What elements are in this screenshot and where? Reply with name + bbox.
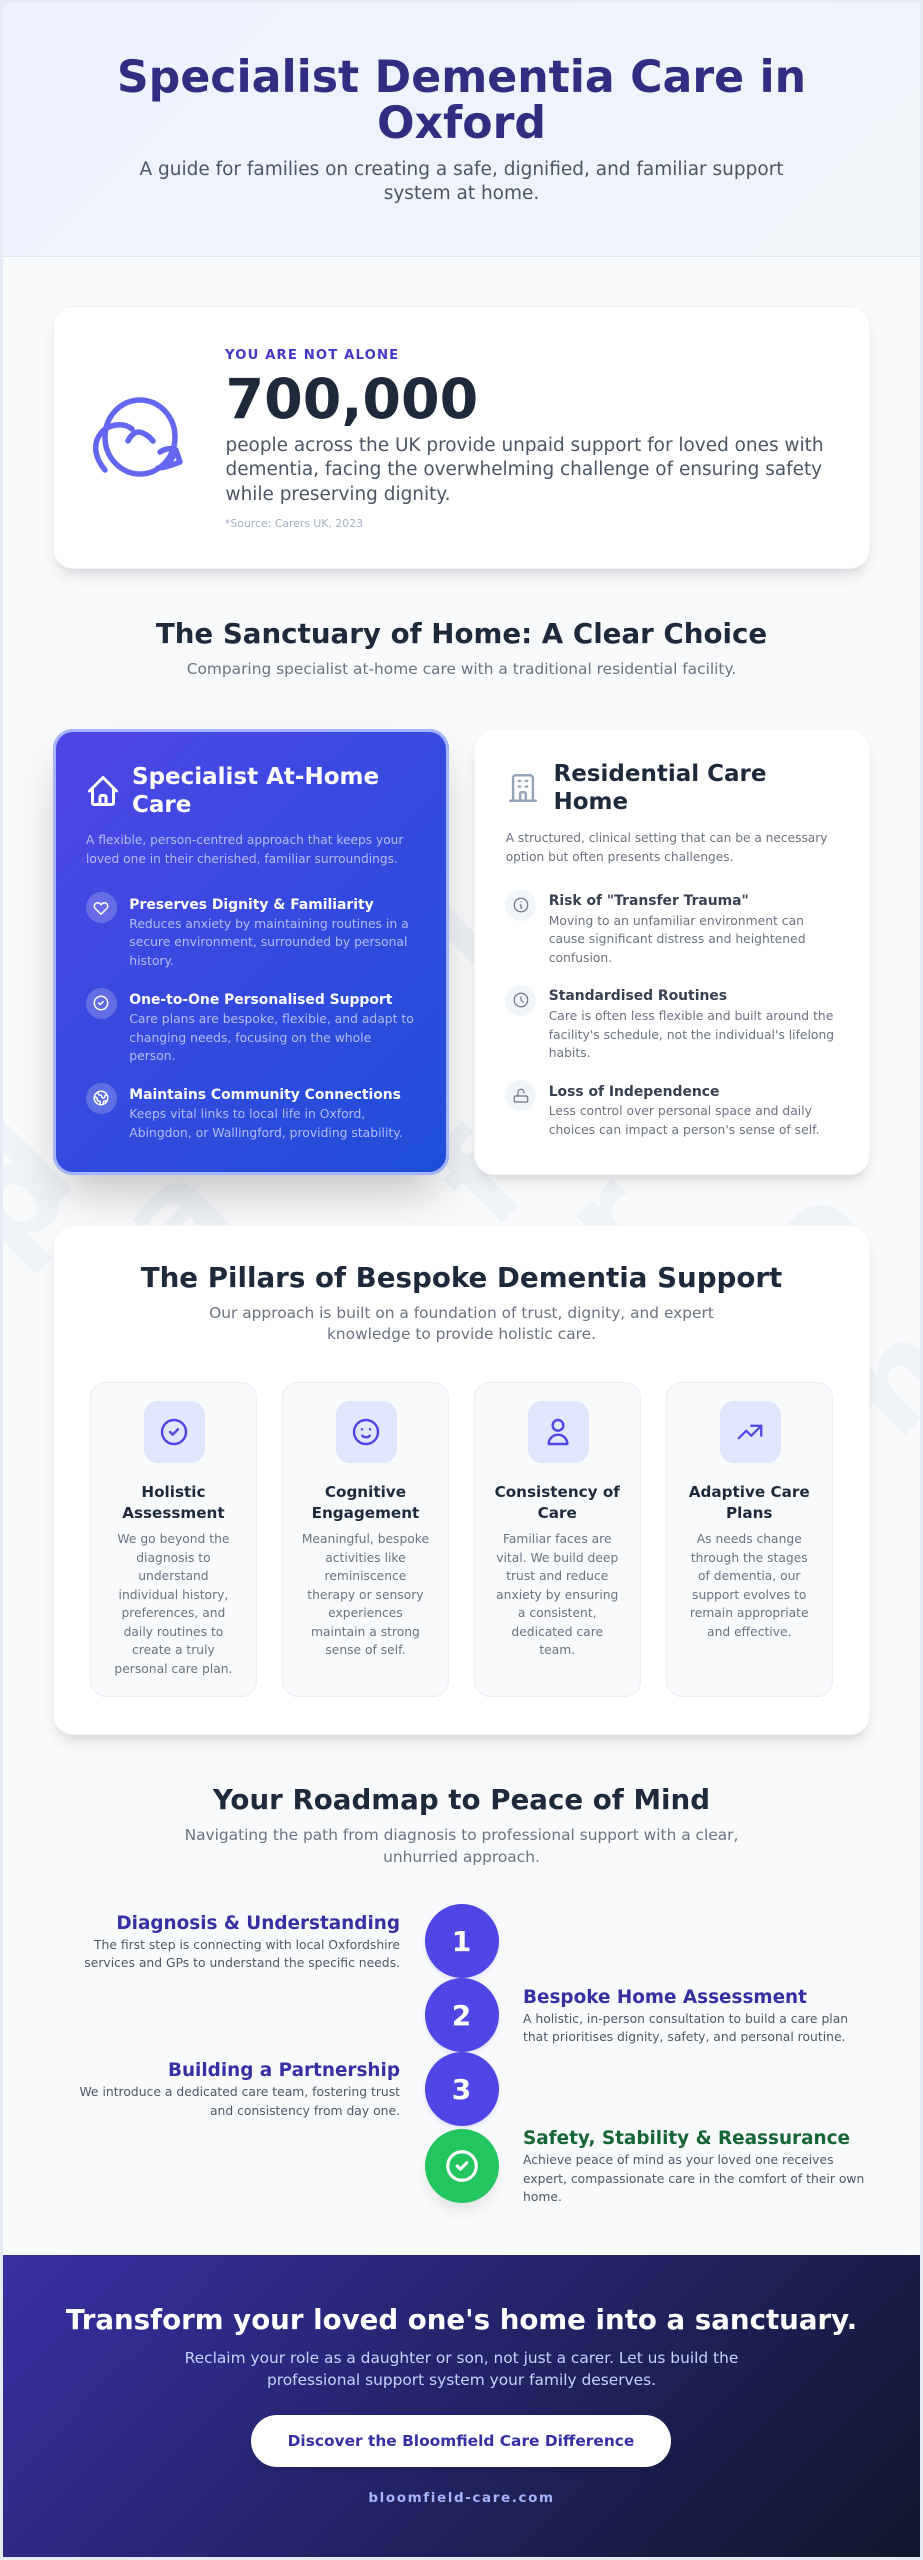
item text: choices can impact a person's sense of self.	[549, 1123, 820, 1137]
item text: Care plans are bespoke, flexible, and adapt to	[129, 1012, 414, 1026]
step 1 number: 1	[452, 1925, 471, 1958]
item: transfer trauma	[505, 890, 806, 965]
heading: sanctuary section: The Sanctuary of Home: A Clear Choice	[156, 617, 767, 650]
subheading	[209, 1304, 714, 1343]
pillar title: Plans	[726, 1504, 772, 1522]
pillar text: reminiscence	[325, 1569, 406, 1583]
subtitle	[139, 159, 784, 204]
pillar text: of dementia, our	[698, 1569, 800, 1583]
step description: We introduce a dedicated care team, fostering trust	[79, 2085, 400, 2099]
pillar text: understand	[138, 1569, 209, 1583]
subheading	[185, 1826, 738, 1866]
title	[117, 52, 806, 148]
item: community connections	[86, 1083, 403, 1140]
pillar text: Familiar faces are	[503, 1532, 612, 1546]
cta text	[3, 2348, 920, 2391]
item text: Care is often less flexible and built around the	[549, 1009, 833, 1023]
step 1 text	[84, 1913, 400, 1970]
cta text: Reclaim your role as a daughter or son, not just a carer. Let us build the	[185, 2349, 738, 2367]
pillar text	[114, 1532, 232, 1676]
pillar text: support evolves to	[692, 1588, 806, 1602]
subtitle: system at home.	[384, 183, 539, 204]
card description: A structured, clinical setting that can be a necessary	[506, 831, 827, 845]
pillar text: create a truly	[132, 1643, 215, 1657]
item text: Keeps vital links to local life in Oxford,	[129, 1107, 365, 1121]
big number: 700,000	[226, 367, 478, 432]
item: personalised support	[86, 988, 414, 1063]
pillar title	[688, 1483, 810, 1522]
heading: Your Roadmap to Peace of Mind	[213, 1783, 710, 1816]
pillar text	[302, 1532, 429, 1657]
step description: The first step is connecting with local Oxfordshire	[94, 1938, 400, 1952]
pillar title: Engagement	[312, 1504, 419, 1522]
item text	[129, 1107, 403, 1140]
pillar text: trust and reduce	[506, 1569, 608, 1583]
pillar text: therapy or sensory	[307, 1588, 424, 1602]
step title: Safety, Stability & Reassurance	[523, 2128, 850, 2149]
icon: check badge	[86, 988, 117, 1018]
title: Specialist Dementia Care in	[117, 52, 806, 102]
card heading: Care	[132, 792, 191, 818]
card description: option but often presents challenges.	[506, 850, 734, 864]
subtitle: A guide for families on creating a safe, dignified, and familiar support	[139, 159, 784, 180]
item text	[549, 1009, 834, 1060]
step 3 number: 3	[452, 2073, 471, 2106]
card heading: Specialist At-Home	[132, 764, 379, 790]
step 2 text	[523, 1987, 848, 2044]
pillar text: sense of self.	[325, 1643, 406, 1657]
item text: changing needs, focusing on the whole	[129, 1031, 371, 1045]
pillar text: activities like	[325, 1551, 406, 1565]
pillar text: remain appropriate	[690, 1606, 809, 1620]
pillar text: Meaningful, bespoke	[302, 1532, 429, 1546]
pillar text	[690, 1532, 809, 1639]
watermark background: l	[394, 869, 532, 1007]
pillar text: team.	[539, 1643, 575, 1657]
item text: Abingdon, or Wallingford, providing stability.	[129, 1126, 403, 1140]
subheading: sanctuary section: Comparing specialist at-home care with a traditional residential facility.	[187, 660, 736, 678]
item text	[129, 1012, 414, 1063]
item text	[549, 1104, 820, 1137]
card heading	[554, 761, 766, 815]
pillar: cognitive engagement	[282, 1382, 449, 1697]
panel: specialist at-home care	[53, 729, 449, 1175]
step description: and consistency from day one.	[210, 2104, 400, 2118]
card heading	[132, 764, 379, 818]
icon: clock	[505, 985, 536, 1016]
item title: One-to-One Personalised Support	[129, 992, 392, 1008]
pillar text: and effective.	[707, 1625, 791, 1639]
pillar text: experiences	[328, 1606, 403, 1620]
step title: Bespoke Home Assessment	[523, 1987, 807, 2008]
description: while preserving dignity.	[226, 484, 450, 505]
item text: history.	[129, 954, 174, 968]
cta button	[251, 2415, 671, 2467]
pillar title: Assessment	[122, 1504, 225, 1522]
step description: that prioritises dignity, safety, and personal routine.	[523, 2030, 845, 2044]
step 1 number	[424, 1904, 498, 1978]
icon: person	[528, 1401, 588, 1463]
item title: Loss of Independence	[549, 1084, 719, 1100]
item text: confusion.	[549, 951, 612, 965]
item text: Less control over personal space and daily	[549, 1104, 812, 1118]
card description	[86, 833, 404, 866]
website: bloomfield-care.com	[368, 2490, 555, 2506]
pillar text: vital. We build deep	[496, 1551, 618, 1565]
pillar text: As needs change	[697, 1532, 802, 1546]
step description: A holistic, in-person consultation to build a care plan	[523, 2012, 848, 2026]
step description: home.	[523, 2190, 562, 2204]
pillar text: diagnosis to	[136, 1551, 211, 1565]
watermark background: a	[88, 1130, 258, 1300]
pillar title: Care	[538, 1504, 577, 1522]
description	[226, 434, 824, 505]
item text: Reduces anxiety by maintaining routines in a	[129, 917, 409, 931]
step description	[523, 2151, 903, 2206]
icon: building	[509, 774, 537, 802]
pillar text: through the stages	[691, 1551, 808, 1565]
step description: services and GPs to understand the specific needs.	[84, 1956, 400, 1970]
icon: caring hands	[92, 397, 183, 477]
icon: smile	[336, 1401, 397, 1463]
icon: info	[505, 890, 536, 920]
item: dignity	[86, 892, 409, 968]
subheading: unhurried approach.	[383, 1848, 540, 1866]
pillar: holistic assessment	[90, 1382, 257, 1697]
icon: check circle	[144, 1401, 205, 1463]
icon: heart	[86, 892, 117, 923]
step 4 text	[523, 2128, 864, 2204]
pillar text: daily routines to	[124, 1625, 223, 1639]
item: standardised routines	[505, 985, 834, 1060]
section: roadmap	[79, 1783, 864, 2212]
pillar text: maintain a strong	[311, 1625, 420, 1639]
pillar text: anxiety by ensuring	[496, 1588, 618, 1602]
heading: The Pillars of Bespoke Dementia Support	[141, 1261, 782, 1294]
panel: pillars of support	[53, 1225, 870, 1735]
pillar text: dedicated care	[511, 1625, 603, 1639]
description: dementia, facing the overwhelming challenge of ensuring safety	[226, 459, 822, 480]
step description	[84, 1938, 400, 1970]
cta button: Discover the Bloomfield Care Difference	[288, 2432, 634, 2450]
cta text: professional support system your family deserves.	[267, 2371, 656, 2389]
item title: Standardised Routines	[549, 988, 727, 1004]
subheading: Navigating the path from diagnosis to professional support with a clear,	[185, 1826, 738, 1844]
step description: Achieve peace of mind as your loved one receives	[523, 2153, 834, 2167]
pillar: adaptive care plans	[666, 1382, 832, 1697]
pillar title: Consistency of	[495, 1483, 620, 1501]
step description: expert, compassionate care in the comfort of their own	[523, 2172, 864, 2186]
step description	[79, 2085, 400, 2118]
watermark background: r	[534, 1144, 686, 1296]
title: Oxford	[377, 98, 546, 148]
subheading: Our approach is built on a foundation of trust, dignity, and expert	[209, 1304, 714, 1322]
pillar text	[496, 1532, 618, 1657]
pillar: consistency of care	[474, 1382, 640, 1697]
pillar text: We go beyond the	[117, 1532, 229, 1546]
pillar text: individual history,	[119, 1588, 228, 1602]
pillar text: personal care plan.	[114, 1662, 232, 1676]
item text: Moving to an unfamiliar environment can	[549, 914, 804, 928]
item text	[129, 917, 409, 968]
item: loss of independence	[505, 1080, 820, 1137]
card heading: Home	[554, 789, 628, 815]
item title: Maintains Community Connections	[129, 1087, 401, 1103]
item text	[549, 914, 806, 965]
step 2 number: 2	[452, 1999, 471, 2032]
step title: Diagnosis & Understanding	[116, 1913, 400, 1934]
step 3 number	[424, 2052, 498, 2126]
item text: secure environment, surrounded by personal	[129, 935, 407, 949]
pillar text: preferences, and	[121, 1606, 225, 1620]
item text: person.	[129, 1049, 176, 1063]
card description: A flexible, person-centred approach that keeps your	[86, 833, 403, 847]
icon: open lock	[505, 1080, 536, 1111]
description: people across the UK provide unpaid support for loved ones with	[226, 434, 824, 456]
item text: habits.	[549, 1046, 591, 1060]
item text: facility's schedule, not the individual's lifelong	[549, 1028, 834, 1042]
pillar title	[312, 1483, 419, 1522]
header	[3, 3, 920, 257]
panel: residential care home	[474, 729, 870, 1175]
card description: loved one in their cherished, familiar surroundings.	[86, 852, 398, 866]
step 4 check	[424, 2129, 498, 2203]
pillar text: a consistent,	[518, 1606, 597, 1620]
panel: statistic hero card	[53, 306, 870, 569]
pillar title	[495, 1483, 620, 1522]
cta heading: Transform your loved one's home into a sanctuary.	[66, 2303, 857, 2336]
panel: call to action	[3, 2255, 920, 2557]
step 2 number	[424, 1978, 498, 2052]
pillar title: Holistic	[141, 1483, 205, 1501]
source: *Source: Carers UK, 2023	[225, 517, 363, 530]
subheading: knowledge to provide holistic care.	[327, 1325, 596, 1343]
icon: house	[88, 776, 118, 806]
pillar title	[122, 1483, 225, 1522]
card heading: Residential Care	[554, 761, 766, 787]
step 3 text	[79, 2060, 400, 2118]
step title: Building a Partnership	[168, 2060, 400, 2081]
icon: trending up	[720, 1401, 780, 1463]
watermark background: o	[728, 1153, 898, 1323]
step description	[523, 2012, 848, 2044]
item title: Risk of "Transfer Trauma"	[549, 893, 749, 909]
pillar title: Cognitive	[325, 1483, 406, 1501]
watermark background: f	[406, 1106, 554, 1254]
eyebrow: YOU ARE NOT ALONE	[225, 348, 399, 363]
item text: cause significant distress and heightened	[549, 932, 806, 946]
pillar title: Adaptive Care	[689, 1483, 810, 1501]
icon: globe	[86, 1083, 117, 1114]
card description	[506, 831, 827, 864]
item title: Preserves Dignity & Familiarity	[129, 897, 374, 913]
